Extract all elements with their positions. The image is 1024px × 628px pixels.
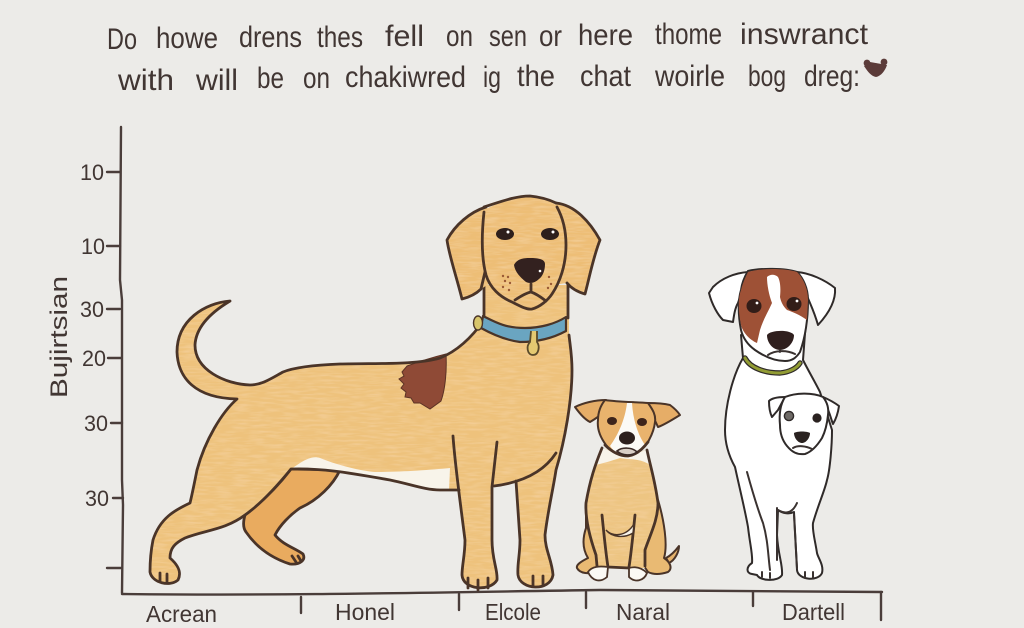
leg lines [747,472,813,578]
puppy head [769,394,839,454]
white chest [596,448,650,465]
left ear [575,400,606,422]
x axis: Honel [335,599,395,625]
title: be [257,62,284,95]
collar [745,358,800,373]
title: woirle [654,60,725,93]
large tan dog [150,196,600,590]
title: with [117,64,174,97]
eyes [746,297,802,313]
brown head patch [739,269,808,343]
mouth [768,350,795,355]
title: thes [317,21,363,54]
x axis: Dartell [782,599,845,625]
eyes [607,417,617,425]
body [725,320,832,580]
white dog with puppy [709,269,839,580]
title: on [303,62,330,95]
paw lines [160,556,543,590]
x axis: Acrean [146,601,217,627]
torso [586,448,658,568]
title: fell [385,20,424,53]
head [739,269,808,361]
head [598,400,655,456]
tail [666,546,679,563]
collar [481,316,566,342]
title: dreg: [804,60,860,93]
nose [619,432,635,444]
title: here [578,19,633,52]
nose [767,331,794,350]
y axis: 30 [85,486,109,511]
title: inswranct [740,18,869,51]
title: drens [239,21,302,54]
title: the [517,60,555,93]
x axis [122,590,882,627]
front paws [588,567,647,580]
y axis: 10 [81,234,105,259]
body [150,285,572,588]
eyes [496,228,559,240]
right ear [552,203,600,294]
neck and head [484,285,569,320]
shoulder spot [399,354,446,409]
title: will [195,64,238,97]
title: sen [489,20,527,53]
belly patch [291,457,450,490]
title: bog [748,60,786,93]
haunches and feet [577,500,671,574]
title: howe [156,22,218,55]
title: or [539,20,562,53]
y axis: 30 [80,297,104,322]
y axis: 20 [82,346,106,371]
title: ig [483,61,501,94]
right ear [648,403,680,427]
front legs outline [453,335,572,588]
torso outline [586,448,658,568]
title: on [446,20,473,53]
right ear [797,272,835,325]
icon: paw [864,59,887,77]
x axis: Naral [616,599,670,625]
title: chat [580,60,632,93]
mouth [515,284,546,301]
y axis label: Bujirtsian [46,276,73,398]
y axis [80,127,123,593]
collar tag [528,331,539,355]
face [483,196,566,308]
hind leg [244,469,340,564]
whisker dots [502,275,552,291]
collar buckle [474,316,482,330]
title: Do [107,23,137,56]
blaze [610,403,645,456]
title [107,18,869,97]
y axis: 30 [84,411,108,436]
nose [514,258,545,283]
y axis: 10 [80,160,104,185]
title: chakiwred [345,61,466,94]
body outline [150,301,484,583]
small sitting puppy [575,400,680,580]
mouth [617,448,637,455]
left ear [709,272,748,322]
x axis: Elcole [485,599,541,625]
left ear [447,207,495,299]
belly patch [606,524,634,536]
title: thome [655,18,722,51]
